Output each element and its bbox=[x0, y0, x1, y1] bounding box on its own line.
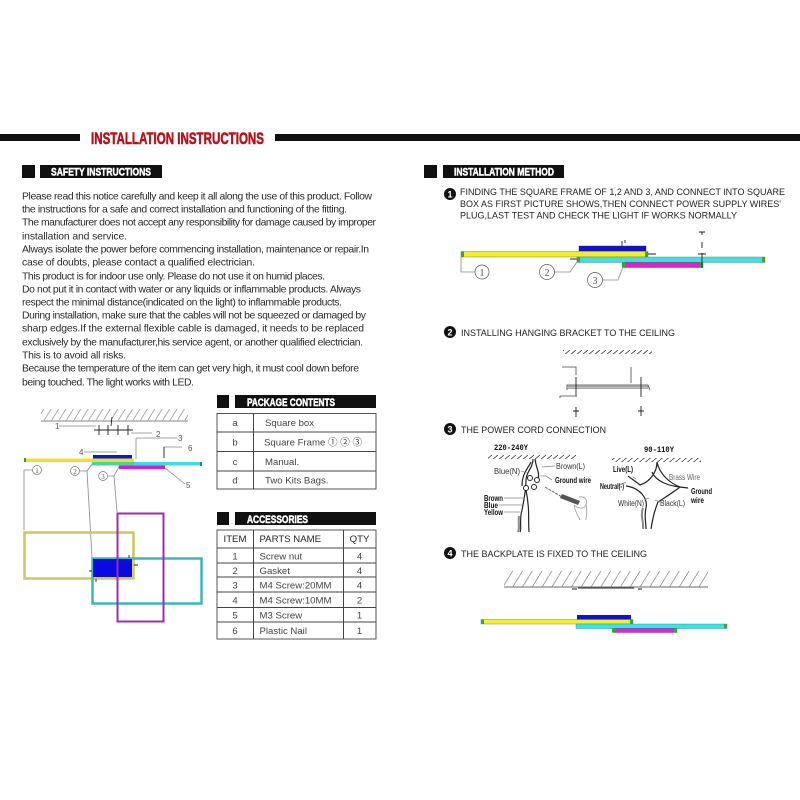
step 3 wiring: 90-110V: Live(L) bbox=[613, 465, 633, 474]
step 3 wiring: 220-240V bbox=[484, 444, 591, 532]
text block: safety notice: Because the temperature of the item can get very high, it must cool down before bbox=[22, 364, 359, 374]
table: accessories: 4 bbox=[357, 552, 363, 562]
table: package contents: a bbox=[232, 418, 238, 429]
text block: safety notice: Do not put it in contact with water or any liquids or inflammable products. Always bbox=[22, 284, 361, 296]
text block: safety notice: case of doubts, please contact a qualified electrician. bbox=[22, 258, 255, 268]
table: accessories: M3 Screw bbox=[260, 610, 302, 622]
step 3 wiring: 220-240V: Brown bbox=[484, 494, 503, 503]
table: accessories: 1 bbox=[357, 626, 362, 637]
exploded assembly diagram: 4 bbox=[79, 448, 84, 457]
title banner bbox=[0, 130, 800, 148]
step 2 text: INSTALLING HANGING BRACKET TO THE CEILING bbox=[461, 327, 675, 338]
table: accessories bbox=[217, 530, 376, 639]
table: package contents: c bbox=[233, 457, 238, 468]
heading: accessories bbox=[217, 512, 376, 526]
step 3 wiring: 90-110V: Ground bbox=[691, 487, 712, 496]
exploded assembly diagram: 3 bbox=[178, 434, 183, 443]
step 3 wiring: 220-240V: Blue(N) bbox=[494, 467, 520, 476]
step 4 diagram: fixed to ceiling bbox=[481, 571, 727, 632]
frame 1 callout: 1 bbox=[35, 467, 39, 475]
step 3 wiring: 220-240V: Blue bbox=[484, 501, 498, 510]
table: accessories: 4 bbox=[357, 566, 363, 577]
step 1 text: FINDING THE SQUARE FRAME OF 1,2 AND 3, AND CONNECT INTO SQUARE bbox=[460, 186, 785, 197]
text block: safety notice: This product is for indoor use only. Please do not use it on humid places. bbox=[22, 272, 325, 282]
text block: safety notice: The manufacturer does not accept any responsibility for damage caused by improper bbox=[22, 218, 377, 228]
table: accessories: 2 bbox=[357, 596, 362, 606]
table: package contents: Square box bbox=[265, 418, 314, 429]
table: accessories: Gasket bbox=[260, 566, 290, 577]
table: accessories: M4 Screw:10MM bbox=[260, 596, 331, 606]
step 4 text: THE BACKPLATE IS FIXED TO THE CEILING bbox=[461, 548, 647, 559]
text block: safety notice: the instructions for a safe and correct installation and functioning of the fitting. bbox=[22, 204, 347, 216]
callout 2 bbox=[540, 264, 554, 280]
table: accessories: 4 bbox=[232, 596, 238, 606]
callout 1: 1 bbox=[480, 268, 484, 279]
table: accessories: 4 bbox=[357, 580, 363, 592]
exploded assembly diagram bbox=[24, 409, 202, 622]
step 3 wiring: 90-110V: wire bbox=[690, 496, 704, 505]
text block: safety notice: Please read this notice carefully and keep it all along the use of this product. Follow bbox=[22, 192, 372, 202]
table: accessories: QTY bbox=[350, 534, 370, 545]
exploded assembly diagram: 6 bbox=[188, 444, 193, 453]
step 3 wiring: 90-110V: Neutral(-) bbox=[600, 482, 624, 491]
text block: safety notice bbox=[22, 192, 377, 388]
step 1 text: 1 bbox=[447, 190, 453, 200]
table: package contents: b bbox=[232, 438, 238, 448]
table: accessories: M4 Screw:20MM bbox=[260, 580, 331, 592]
step 3 wiring: 90-110V: Brass Wire bbox=[669, 473, 700, 482]
step 3 wiring: 220-240V: Brown(L) bbox=[556, 462, 585, 471]
text block: safety notice: installation and service. bbox=[22, 232, 127, 242]
heading: installation method: INSTALLATION METHOD bbox=[454, 166, 554, 178]
heading: installation method bbox=[424, 165, 564, 178]
table: accessories: PARTS NAME bbox=[260, 534, 321, 545]
text block: safety notice: Always isolate the power before commencing installation, maintenance or repair.In bbox=[22, 244, 369, 256]
text block: safety notice: This is to avoid all risks. bbox=[22, 350, 126, 362]
callout 2: 2 bbox=[544, 268, 550, 279]
step 2 diagram: hanging bracket bbox=[560, 350, 652, 417]
step 3 wiring: 90-110V: Black(L) bbox=[660, 499, 685, 508]
step 3 wiring: 90-110V: White(N) bbox=[618, 499, 644, 508]
frame 2 callout: 2 bbox=[73, 468, 77, 476]
exploded assembly diagram: 1 bbox=[55, 422, 60, 431]
frame 3 callout: 3 bbox=[101, 473, 105, 481]
icon: hand with screwdriver bbox=[545, 487, 587, 520]
title banner: INSTALLATION INSTRUCTIONS bbox=[91, 130, 264, 148]
step 1 text: PLUG,LAST TEST AND CHECK THE LIGHT IF WORKS NORMALLY bbox=[460, 210, 738, 220]
table: package contents: Square Frame ① ② ③ bbox=[264, 438, 363, 448]
step 1 diagram: frames side view bbox=[461, 232, 765, 288]
step 2 text: 2 bbox=[447, 328, 453, 338]
heading: safety instructions bbox=[22, 165, 162, 178]
step 1 text: BOX AS FIRST PICTURE SHOWS,THEN CONNECT POWER SUPPLY WIRES' bbox=[460, 198, 781, 209]
step 3 wiring: 90-110V bbox=[600, 446, 712, 529]
table: accessories: 1 bbox=[232, 552, 238, 562]
frame 3 callout bbox=[98, 472, 108, 481]
text block: safety notice: respect the minimal distance(indicated on the light) to inflammable products. bbox=[22, 298, 342, 308]
step 3 text: 3 bbox=[447, 424, 453, 434]
table: accessories: 1 bbox=[357, 610, 362, 622]
table: package contents: Manual. bbox=[265, 457, 299, 468]
table: package contents: d bbox=[232, 476, 238, 486]
frame 1 callout bbox=[32, 466, 42, 475]
table: accessories: ITEM bbox=[224, 534, 246, 545]
heading: safety instructions: SAFETY INSTRUCTIONS bbox=[51, 166, 151, 178]
step 3 wiring: 220-240V: 220-240Y bbox=[494, 444, 528, 453]
table: accessories: Plastic Nail bbox=[260, 626, 307, 637]
table: package contents: Two Kits Bags. bbox=[265, 476, 328, 486]
table: accessories: 2 bbox=[232, 566, 238, 577]
callout 3: 3 bbox=[592, 276, 598, 287]
step 3 text: THE POWER CORD CONNECTION bbox=[461, 424, 606, 435]
step 3 wiring: 220-240V: Ground wire bbox=[555, 476, 591, 485]
table: accessories: 5 bbox=[232, 610, 238, 622]
table: accessories: 3 bbox=[232, 580, 238, 592]
frame 2 callout bbox=[70, 466, 80, 476]
text block: safety notice: exclusively by the manufacturer,his service agent, or another qualified electrician. bbox=[22, 338, 363, 348]
text block: safety notice: sharp edges.If the external flexible cable is damaged, it needs to be replaced bbox=[22, 324, 364, 334]
text block: safety notice: being touched. The light works with LED. bbox=[22, 378, 194, 388]
text block: safety notice: During installation, make sure that the cables will not be squeezed or damaged by bbox=[22, 310, 367, 322]
step 1 text bbox=[444, 186, 785, 220]
table: accessories: Screw nut bbox=[260, 552, 302, 562]
step 3 wiring: 90-110V: 90-110Y bbox=[644, 446, 674, 455]
heading: accessories: ACCESSORIES bbox=[247, 514, 308, 526]
exploded assembly diagram: 2 bbox=[156, 430, 161, 439]
step 3 wiring: 220-240V: Yellow bbox=[484, 508, 504, 517]
table: accessories: 6 bbox=[232, 626, 238, 637]
callout 1 bbox=[475, 265, 489, 279]
step 4 text: 4 bbox=[447, 548, 453, 558]
table: package contents bbox=[217, 414, 376, 489]
callout 3 bbox=[588, 272, 602, 288]
exploded assembly diagram: 5 bbox=[186, 481, 191, 490]
heading: package contents: PACKAGE CONTENTS bbox=[247, 397, 335, 409]
heading: package contents bbox=[217, 395, 376, 409]
